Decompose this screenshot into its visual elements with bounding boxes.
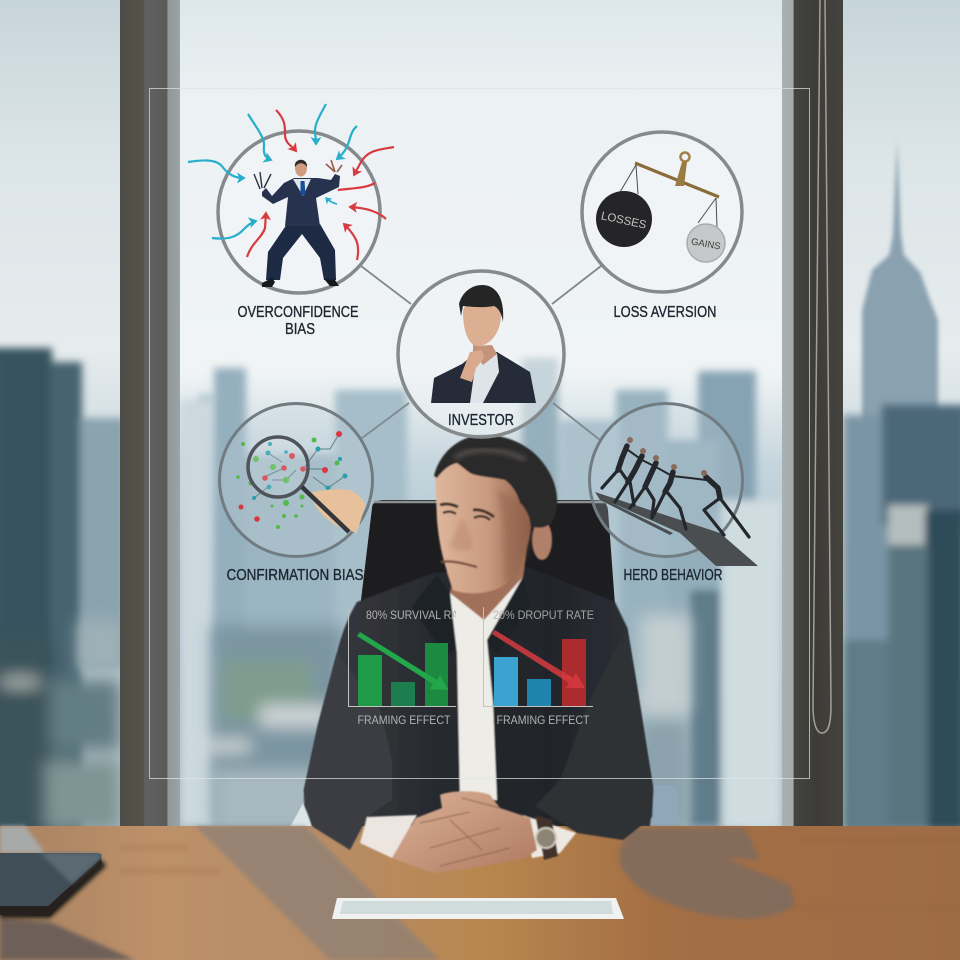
shirt	[450, 577, 523, 800]
investor arms and hands	[304, 627, 653, 873]
icon: overwhelmed businessman	[254, 160, 342, 287]
panel: investor node	[398, 271, 564, 437]
ear	[532, 520, 552, 560]
label: loss aversion: LOSS AVERSION	[614, 304, 716, 321]
label: investor: INVESTOR	[448, 412, 514, 429]
icon: red stress arrows	[247, 110, 394, 260]
left city view	[0, 348, 125, 838]
clasped hands	[392, 791, 537, 873]
label: herd behavior: HERD BEHAVIOR	[624, 567, 722, 584]
glass panel outline	[150, 88, 810, 778]
blue and red bars	[494, 639, 586, 706]
panel: framing effect left chart	[348, 607, 456, 724]
icon: magnifying glass and hand	[248, 437, 365, 533]
face	[435, 455, 531, 593]
hair highlight	[455, 450, 525, 460]
panel: herd behavior	[590, 404, 758, 584]
shadow bands on desk	[0, 826, 795, 960]
window frame	[120, 0, 843, 826]
panel: loss aversion	[582, 132, 742, 321]
icon: herd heads	[627, 437, 707, 476]
icon: slope	[595, 492, 758, 566]
wristwatch	[535, 815, 558, 860]
hair	[434, 435, 557, 528]
eyes	[443, 512, 490, 520]
right shirt cuff	[523, 815, 576, 858]
panel: overconfidence bias	[188, 104, 394, 338]
connector lines	[361, 266, 601, 440]
icon: losses weight: LOSSES	[600, 210, 648, 232]
chair	[290, 500, 678, 827]
label: overconfidence bias: OVERCONFIDENCE	[238, 304, 358, 321]
label: overconfidence bias: BIAS	[285, 321, 315, 338]
icon: investor portrait	[431, 285, 536, 403]
laptop on desk	[0, 853, 106, 918]
center city view	[180, 0, 782, 830]
desk	[0, 826, 960, 960]
investor figure torso and head	[304, 435, 653, 827]
nose	[450, 520, 473, 551]
finger lines	[420, 798, 510, 866]
neck	[450, 540, 528, 620]
icon: blue stress arrows	[188, 104, 357, 239]
label: confirmation bias: CONFIRMATION BIAS	[226, 567, 364, 584]
icon: gains weight: GAINS	[690, 236, 721, 252]
green arrow	[357, 632, 448, 690]
mouth	[441, 561, 477, 567]
icon: data dots under magnifier	[236, 431, 348, 529]
left sleeve	[304, 653, 392, 850]
red arrow	[492, 630, 585, 688]
eyebrows	[440, 504, 494, 517]
icon: balance scale	[596, 152, 725, 262]
chart caption: 80% SURVIVAL RATE	[366, 608, 471, 622]
chart label: FRAMING EFFECT	[358, 713, 451, 727]
chart caption: 20% DROPUT RATE	[493, 608, 594, 622]
right sleeve	[535, 627, 653, 840]
left shirt cuff	[360, 815, 417, 858]
green bars	[358, 643, 448, 706]
jacket lapels	[412, 575, 530, 655]
icon: herd of businesspeople	[602, 446, 749, 537]
jacket body	[304, 567, 653, 827]
document tablet on desk	[332, 898, 624, 919]
wood grain	[120, 838, 960, 911]
chart axis	[484, 607, 593, 706]
face shadow	[497, 490, 530, 584]
panel: confirmation bias	[220, 404, 372, 584]
chart label: FRAMING EFFECT	[496, 713, 590, 727]
panel: framing effect right chart	[484, 607, 594, 727]
chart axis	[348, 607, 456, 706]
right city view	[843, 140, 960, 835]
